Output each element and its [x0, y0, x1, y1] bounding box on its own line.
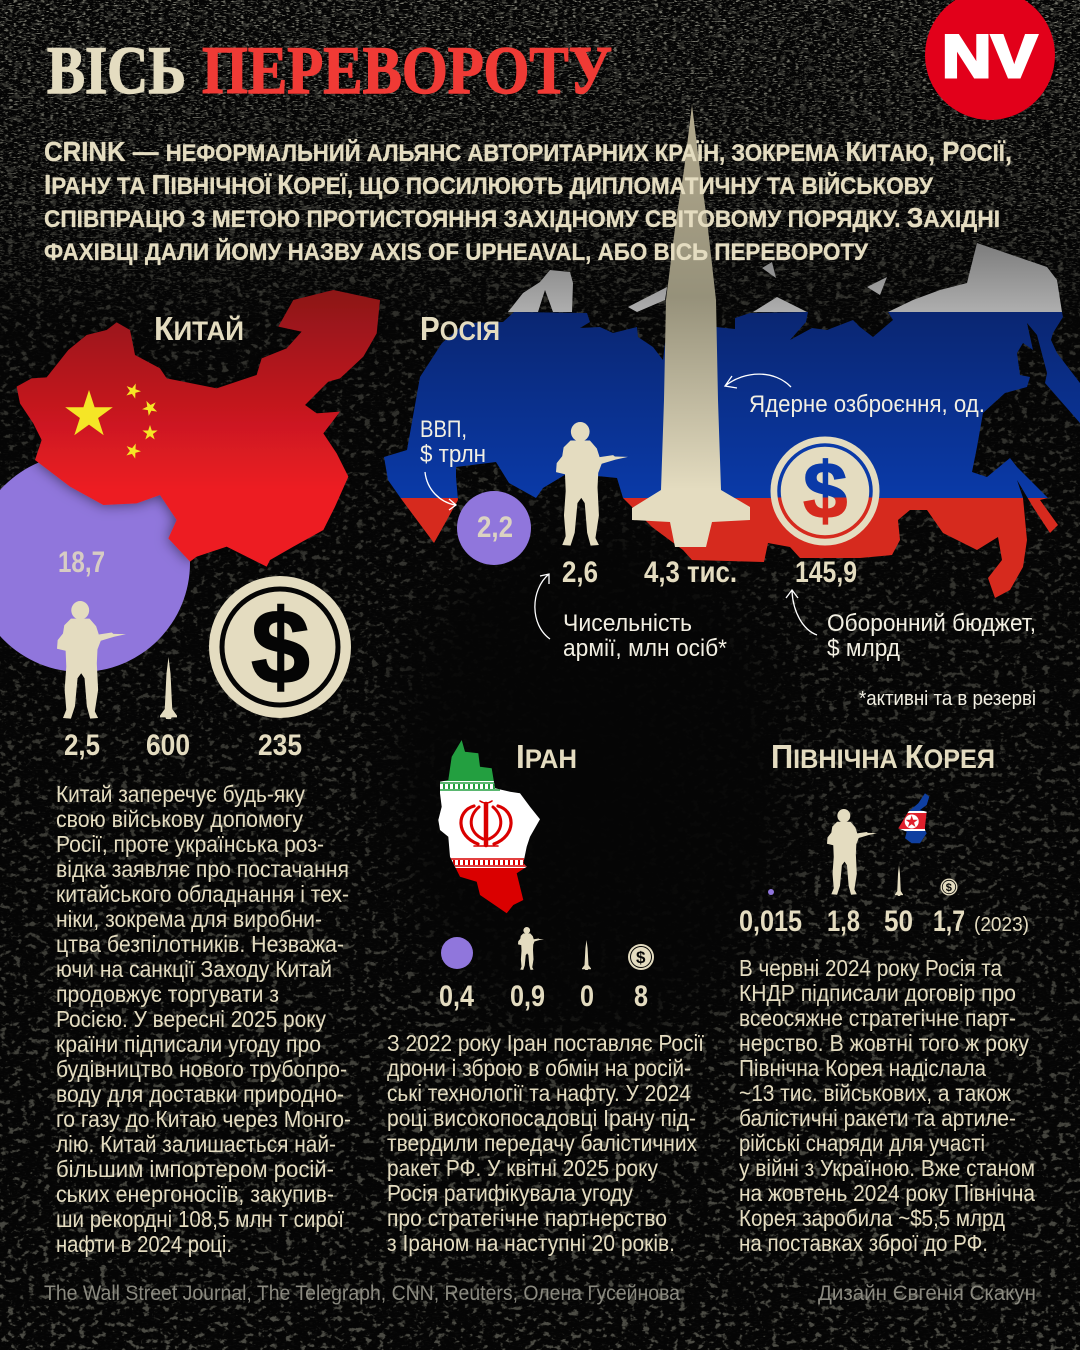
text block: North Korea: нерство. В жовтні того ж року — [739, 1030, 1029, 1056]
map: Iran with flag — [438, 740, 540, 914]
text block: North Korea: всеосяжне стратегічне парт- — [739, 1005, 1016, 1031]
text block: North Korea: на поставках зброї до РФ. — [739, 1230, 988, 1256]
icon: missile — [895, 865, 903, 896]
GDP circle — [768, 889, 774, 895]
value: army: 0,9 — [510, 980, 545, 1013]
text block: China: воду для доставки природно- — [56, 1081, 344, 1107]
value: army: 2,6 — [562, 556, 598, 589]
text block: China: Росією. У вересні 2025 року — [56, 1006, 326, 1032]
value: army: 2,5 — [64, 729, 100, 762]
label: nuclear: Ядерне озброєння, од. — [749, 391, 985, 418]
icon: dollar coin — [209, 576, 351, 718]
text block: Iran: З 2022 року Іран поставляє Росії — [387, 1030, 705, 1056]
text block: North Korea: балістичні ракети та артиле- — [739, 1105, 1016, 1131]
text block: Iran: ські технології та нафту. У 2024 — [387, 1080, 691, 1106]
legend labels and arrows — [420, 374, 1036, 710]
value: nuclear: 0 — [580, 980, 594, 1013]
icon: soldier — [57, 601, 126, 719]
text block: Iran: дрони і зброю в обмін на росій- — [387, 1055, 691, 1081]
text block: North Korea: у війні з Україною. Вже станом — [739, 1155, 1035, 1181]
year note: (2023) — [974, 914, 1029, 936]
icon: missile — [160, 657, 177, 719]
text block: China: будівництво нового трубопро- — [56, 1056, 347, 1082]
text block: Iran: про стратегічне партнерство — [387, 1205, 667, 1231]
map: China with flag — [17, 290, 380, 567]
text block: China — [56, 781, 351, 1257]
Iran stats — [439, 927, 654, 1013]
icon: soldier — [556, 422, 628, 546]
text block: Iran: році високопосадовці Ірану під- — [387, 1105, 696, 1131]
icon: dollar coin — [940, 878, 958, 896]
intro text: ФАХІВЦІ ДАЛИ ЙОМУ НАЗВУ AXIS OF UPHEAVAL, АБО ВІСЬ ПЕРЕВОРОТУ — [44, 238, 869, 266]
footnote: *активні та в резерві — [859, 688, 1036, 710]
text block: Iran — [387, 1030, 705, 1256]
label: budget — [827, 610, 1036, 662]
value: army: 1,8 — [827, 905, 860, 938]
icon: dollar coin: $ — [251, 588, 310, 706]
text block: North Korea: на жовтень 2024 року Північна — [739, 1180, 1035, 1206]
heading: China: КИТАЙ — [154, 310, 244, 347]
arrow: budget — [786, 590, 817, 635]
icon: missile — [582, 940, 591, 970]
label: GDP: ВВП, — [420, 416, 467, 443]
text block: Iran: ракет РФ. У квітні 2025 року — [387, 1155, 658, 1181]
text block: Iran: твердили передачу балістичних — [387, 1130, 697, 1156]
icon: dollar coin with flag colours — [770, 436, 880, 546]
text block: China: китайського обладнання і тех- — [56, 881, 349, 907]
GDP value: 2,2 — [477, 511, 513, 544]
text block: China: відка заявляє про постачання — [56, 856, 349, 882]
value: budget: 235 — [258, 729, 302, 762]
ornament bands — [438, 783, 500, 790]
map: North Korea with flag — [898, 793, 930, 844]
label: budget: Оборонний бюджет, — [827, 610, 1036, 637]
heading: Iran: ІРАН — [516, 738, 577, 775]
value: budget: 145,9 — [795, 556, 857, 589]
text block: North Korea: Корея заробила ~$5,5 млрд — [739, 1205, 1006, 1231]
missile: Russia — [632, 105, 750, 547]
arrow: army — [535, 574, 550, 639]
value: budget: 8 — [634, 980, 648, 1013]
icon: dollar coin — [628, 944, 654, 970]
China stats — [57, 546, 351, 762]
label: army — [563, 610, 727, 662]
arrow: GDP — [425, 472, 456, 510]
North Korea stats — [739, 809, 1029, 938]
icon: dollar coin: $ — [946, 882, 952, 894]
footer: credit: Дизайн Євгенія Скакун — [818, 1282, 1036, 1305]
title — [47, 32, 612, 108]
emblem — [461, 801, 511, 846]
text block: North Korea: КНДР підписали договір про — [739, 980, 1016, 1006]
text block: China: го газу до Китаю через Монго- — [56, 1106, 351, 1132]
text block: China: лію. Китай залишається най- — [56, 1131, 336, 1157]
text block: China: цтва безпілотників. Незважа- — [56, 931, 344, 957]
text block: Iran: з Іраном на наступні 20 років. — [387, 1230, 675, 1256]
value: nuclear: 4,3 тис. — [644, 556, 737, 589]
text block: North Korea: рійські снаряди для участі — [739, 1130, 985, 1156]
text block: China: країни підписали угоду про — [56, 1031, 321, 1057]
flag stars — [65, 381, 161, 460]
map: Russia with flag — [380, 240, 1080, 608]
icon: dollar coin with flag colours: $ — [803, 446, 848, 535]
GDP circle — [457, 491, 531, 565]
text block: China: Китай заперечує будь-яку — [56, 781, 305, 807]
heading: Russia: РОСІЯ — [420, 310, 500, 347]
heading: North Korea: ПІВНІЧНА КОРЕЯ — [771, 738, 995, 775]
text block: China: ючи на санкції Заходу Китай — [56, 956, 332, 982]
GDP value: 18,7 — [58, 546, 105, 579]
text block: China: нафти в 2024 році. — [56, 1231, 232, 1257]
intro text: СПІВПРАЦЮ З МЕТОЮ ПРОТИСТОЯННЯ ЗАХІДНОМУ СВІТОВОМУ ПОРЯДКУ. ЗАХІДНІ — [44, 202, 1000, 233]
label: budget: $ млрд — [827, 635, 900, 662]
icon: soldier — [827, 809, 877, 895]
purple GDP circle: China — [0, 454, 190, 672]
value: nuclear: 50 — [884, 905, 913, 938]
label: GDP — [420, 416, 486, 468]
intro text: CRINK — НЕФОРМАЛЬНИЙ АЛЬЯНС АВТОРИТАРНИХ КРАЇН, ЗОКРЕМА КИТАЮ, РОСІЇ, — [44, 136, 1012, 167]
intro text — [44, 136, 1012, 266]
text block: Iran: Росія ратифікувала угоду — [387, 1180, 633, 1206]
text block: China: ши рекордні 108,5 млн т сирої — [56, 1206, 345, 1232]
title: ВІСЬ — [47, 32, 186, 108]
intro text: ІРАНУ ТА ПІВНІЧНОЇ КОРЕЇ, ЩО ПОСИЛЮЮТЬ ДИПЛОМАТИЧНУ ТА ВІЙСЬКОВУ — [44, 169, 934, 200]
text block: China: ських енергоносіїв, закупив- — [56, 1181, 334, 1207]
text block: North Korea — [739, 955, 1035, 1256]
label: army: Чисельність — [563, 610, 692, 637]
value: nuclear: 600 — [146, 729, 190, 762]
text block: China: свою військову допомогу — [56, 806, 303, 832]
text block: China: Росії, проте українська роз- — [56, 831, 324, 857]
logo: NV: NV — [942, 23, 1037, 90]
label: GDP: $ трлн — [420, 441, 486, 468]
text block: China: більшим імпортером росій- — [56, 1156, 334, 1182]
Russia stats — [457, 422, 880, 589]
title: ПЕРЕВОРОТУ — [202, 32, 612, 108]
text block: North Korea: ~13 тис. військових, а також — [739, 1080, 1012, 1106]
value: budget: 1,7 — [933, 905, 965, 938]
icon: dollar coin: $ — [636, 948, 646, 967]
footer: sources: The Wall Street Journal, The Telegraph, CNN, Reuters, Олена Гусейнова — [44, 1282, 680, 1305]
icon: soldier — [518, 927, 544, 970]
logo: NV — [925, 0, 1055, 120]
text block: North Korea: Північна Корея надіслала — [739, 1055, 986, 1081]
GDP circle — [441, 937, 473, 969]
text block: China: продовжує торгувати з — [56, 981, 279, 1007]
value: GDP: 0,015 — [739, 905, 802, 938]
text block: China: ніки, зокрема для виробни- — [56, 906, 322, 932]
value: GDP: 0,4 — [439, 980, 474, 1013]
text block: North Korea: В червні 2024 року Росія та — [739, 955, 1002, 981]
label: army: армії, млн осіб* — [563, 635, 727, 662]
arrow: nuclear — [725, 374, 791, 388]
